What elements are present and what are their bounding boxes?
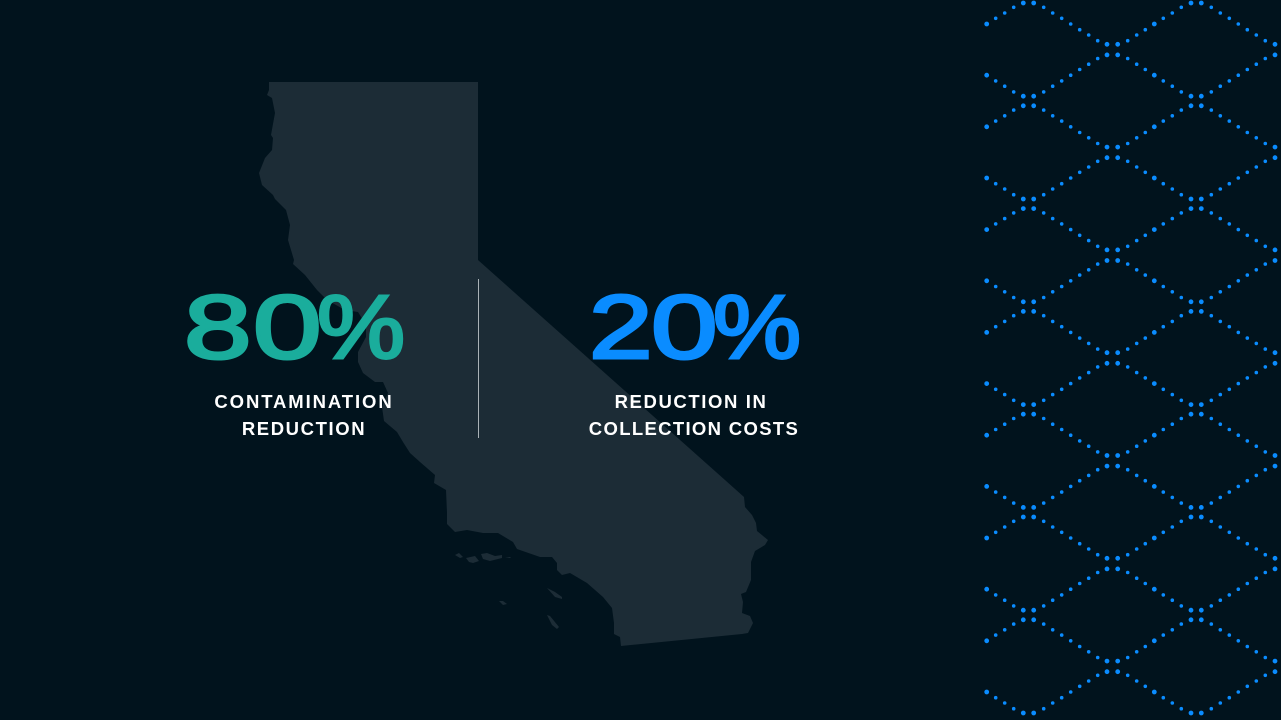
value: 80%: 8 [184, 278, 252, 378]
value: 20%: 0 [651, 278, 718, 378]
value: 20%: % [713, 278, 801, 378]
label: contamination reduction [214, 391, 394, 439]
stat: 80% contamination reduction [184, 278, 405, 439]
label: contamination reduction: REDUCTION [242, 418, 366, 439]
value: 20% [589, 278, 801, 378]
value: 20%: 2 [589, 278, 653, 378]
stat: 20% reduction in collection costs [589, 278, 801, 439]
value: 80%: % [317, 278, 405, 378]
value: 80%: 0 [253, 278, 322, 378]
divider line [478, 279, 479, 438]
label: reduction in collection costs [589, 391, 799, 439]
label: contamination reduction: CONTAMINATION [214, 391, 394, 412]
label: reduction in collection costs: REDUCTION IN [615, 391, 767, 412]
label: reduction in collection costs: COLLECTION COSTS [589, 418, 799, 439]
value: 80% [184, 278, 405, 378]
